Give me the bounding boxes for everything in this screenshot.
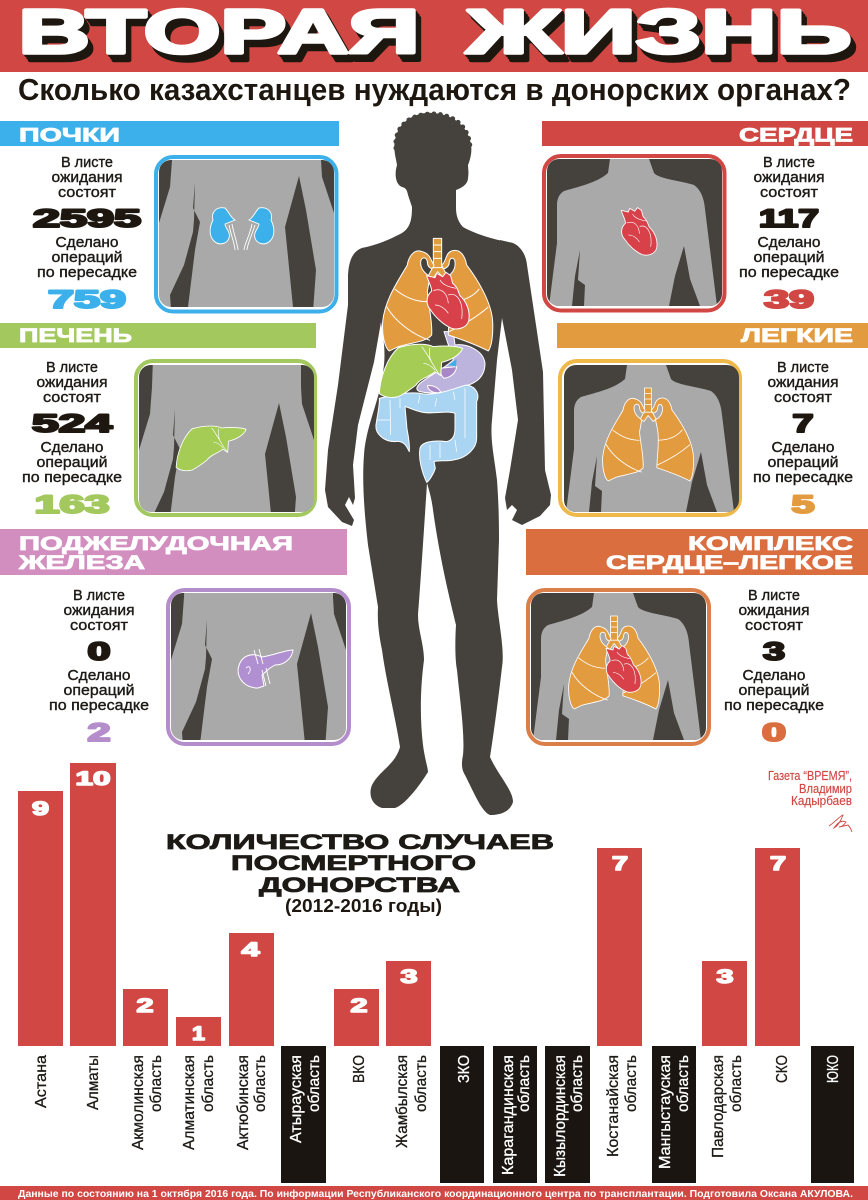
- kidneys stats: [33, 154, 141, 314]
- lungs illustration: [560, 361, 740, 515]
- liver stats: 163: [34, 491, 110, 519]
- region labels: ЗКО: [456, 1055, 473, 1083]
- complex heading: КОМПЛЕКС: [688, 534, 853, 555]
- internal organs: [376, 238, 493, 482]
- pancreas heading: [0, 529, 347, 575]
- panel: pancreas: [0, 529, 351, 746]
- lungs stats: операций: [768, 454, 838, 471]
- complex stats: [724, 587, 824, 747]
- credit: Газета “ВРЕМЯ”,: [768, 769, 852, 783]
- kidneys stats: ожидания: [52, 169, 122, 186]
- heart stats: операций: [754, 249, 824, 266]
- title: ВТОРАЯ: [24, 6, 425, 74]
- bar values: 3: [400, 967, 418, 988]
- chart title: КОЛИЧЕСТВО СЛУЧАЕВ: [166, 831, 554, 854]
- bar values: 9: [32, 799, 49, 820]
- bar values: 7: [612, 854, 628, 875]
- title: ЖИЗНЬ: [467, 0, 854, 70]
- region labels: [33, 1055, 842, 1177]
- region labels: область: [148, 1055, 165, 1112]
- complex stats: Сделано: [743, 667, 805, 684]
- panel: lungs: [557, 323, 868, 519]
- heart illustration: [544, 156, 724, 310]
- pancreas stats: операций: [64, 682, 134, 699]
- lungs stats: состоят: [774, 389, 832, 406]
- heart stats: состоят: [760, 184, 818, 201]
- pancreas heading: ЖЕЛЕЗА: [17, 553, 145, 574]
- lungs stats: по пересадке: [753, 469, 853, 486]
- region labels: Жамбылская: [394, 1055, 411, 1148]
- region labels: Мангыстауская: [657, 1055, 674, 1169]
- bar values: 7: [770, 854, 786, 875]
- region labels: Костанайская: [605, 1055, 622, 1157]
- heart stats: В листе: [763, 154, 815, 171]
- region labels: Астана: [33, 1055, 50, 1108]
- complex stats: 3: [763, 638, 785, 666]
- title: ЖИЗНЬ: [469, 3, 856, 72]
- region labels: Карагандинская: [500, 1055, 517, 1175]
- pancreas illustration: [166, 588, 351, 746]
- kidneys stats: операций: [52, 249, 122, 266]
- region labels: область: [252, 1055, 269, 1112]
- liver stats: В листе: [46, 359, 98, 376]
- liver stats: Сделано: [41, 439, 103, 456]
- liver stats: операций: [36, 454, 108, 471]
- signature: [829, 815, 852, 832]
- kidneys illustration: [154, 155, 338, 314]
- panel: heart: [542, 121, 868, 314]
- header banner: [0, 0, 868, 74]
- heart stats: ожидания: [754, 169, 824, 186]
- complex stats: ожидания: [738, 602, 810, 619]
- region labels: Алматинская: [181, 1055, 198, 1150]
- bar values: 3: [716, 967, 734, 988]
- kidneys heading: [0, 121, 339, 146]
- pancreas stats: состоят: [70, 617, 128, 634]
- bar chart: [18, 763, 854, 1183]
- heart heading: [542, 121, 868, 146]
- title: ВТОРАЯ: [18, 0, 420, 67]
- region labels: Алматы: [85, 1055, 102, 1110]
- kidneys stats: 759: [48, 286, 126, 314]
- red bars: [18, 763, 800, 1046]
- lungs stats: [753, 359, 853, 519]
- kidneys stats: состоят: [58, 184, 116, 201]
- organ: large intestine: [376, 385, 478, 482]
- heart stats: по пересадке: [739, 264, 839, 281]
- organ: liver: [379, 344, 463, 397]
- liver stats: состоят: [43, 389, 101, 406]
- region labels: область: [623, 1055, 640, 1112]
- bar values: 2: [350, 996, 368, 1017]
- chart title: (2012-2016 годы): [285, 896, 442, 916]
- liver heading: ПЕЧЕНЬ: [19, 326, 132, 347]
- pancreas stats: по пересадке: [49, 697, 149, 714]
- bar values: 4: [242, 940, 260, 961]
- bar values: 10: [76, 769, 110, 790]
- region labels: область: [413, 1055, 430, 1112]
- liver illustration: [134, 359, 317, 517]
- organ: stomach: [417, 332, 485, 393]
- heart stats: Сделано: [758, 234, 820, 251]
- liver stats: 524: [32, 410, 112, 438]
- heart heading: СЕРДЦЕ: [739, 126, 853, 146]
- region labels: Акмолинская: [130, 1055, 147, 1150]
- complex heading: СЕРДЦЕ–ЛЕГКОЕ: [606, 553, 853, 574]
- credit: Владимир: [799, 782, 852, 796]
- bar values: 2: [136, 996, 154, 1017]
- kidneys stats: Сделано: [56, 234, 118, 251]
- human body figure: [325, 113, 551, 815]
- chart title: ПОСМЕРТНОГО: [231, 852, 476, 875]
- liver stats: [22, 359, 122, 519]
- region labels: область: [569, 1055, 586, 1112]
- body silhouette: [325, 113, 551, 815]
- region labels: ЮКО: [825, 1055, 842, 1083]
- region labels: Павлодарская: [710, 1055, 727, 1158]
- region labels: СКО: [774, 1055, 791, 1083]
- black zero bars: [281, 1046, 854, 1183]
- organ: lungs: [382, 238, 493, 351]
- panel: heart-lung complex: [526, 529, 868, 747]
- kidneys heading: ПОЧКИ: [19, 126, 120, 146]
- complex stats: по пересадке: [724, 697, 824, 714]
- region labels: Кызылординская: [552, 1055, 569, 1177]
- kidneys stats: по пересадке: [37, 264, 137, 281]
- region labels: Актюбинская: [235, 1055, 252, 1150]
- pancreas heading: ПОДЖЕЛУДОЧНАЯ: [19, 534, 293, 555]
- pancreas stats: ожидания: [64, 602, 134, 619]
- bar values: 1: [192, 1024, 206, 1045]
- region labels: ВКО: [351, 1055, 368, 1083]
- pancreas stats: Сделано: [68, 667, 130, 684]
- chart title: ДОНОРСТВА: [259, 874, 460, 897]
- title: ЖИЗНЬ: [465, 0, 852, 67]
- panel: kidneys: [0, 121, 339, 314]
- complex stats: В листе: [748, 587, 800, 604]
- region labels: область: [675, 1055, 692, 1112]
- liver stats: ожидания: [36, 374, 108, 391]
- credit: Кадырбаев: [791, 794, 852, 808]
- subtitle: Сколько казахстанцев нуждаются в донорских органах?: [18, 72, 851, 107]
- lungs stats: 5: [792, 491, 815, 519]
- lungs stats: В листе: [777, 359, 829, 376]
- pancreas stats: 0: [88, 638, 110, 666]
- title: ВТОРАЯ: [22, 3, 424, 72]
- title: ВТОРАЯ: [20, 0, 422, 70]
- region labels: Атырауская: [288, 1055, 305, 1143]
- region labels: область: [200, 1055, 217, 1112]
- complex illustration: [528, 590, 709, 744]
- pancreas stats: [49, 587, 149, 747]
- kidneys stats: В листе: [61, 154, 113, 171]
- panel: liver: [0, 323, 317, 517]
- credit: [768, 769, 852, 832]
- complex stats: операций: [738, 682, 810, 699]
- heart stats: 117: [759, 205, 819, 233]
- heart stats: 39: [764, 286, 814, 314]
- lungs heading: [557, 323, 868, 348]
- footer: Данные по состоянию на 1 октября 2016 года. По информации Республиканского координационного центра по трансплантации. Подготовила Оксана АКУЛОВА.: [18, 1188, 853, 1200]
- liver heading: [0, 323, 316, 348]
- chart title: [166, 831, 554, 916]
- complex stats: 0: [762, 719, 786, 747]
- pancreas stats: В листе: [73, 587, 125, 604]
- pancreas stats: 2: [88, 719, 110, 747]
- kidneys stats: 2595: [33, 205, 141, 233]
- lungs stats: Сделано: [772, 439, 834, 456]
- lungs heading: ЛЕГКИЕ: [741, 326, 853, 347]
- title: [18, 0, 857, 74]
- liver stats: по пересадке: [22, 469, 122, 486]
- complex stats: состоят: [745, 617, 803, 634]
- bar values: [32, 769, 786, 1045]
- lungs stats: 7: [792, 410, 814, 438]
- lungs stats: ожидания: [768, 374, 838, 391]
- heart stats: [739, 154, 839, 314]
- region labels: область: [728, 1055, 745, 1112]
- title: ЖИЗНЬ: [470, 6, 857, 74]
- organ: heart: [427, 272, 469, 329]
- region labels: область: [516, 1055, 533, 1112]
- complex heading: [526, 529, 868, 575]
- region labels: область: [306, 1055, 323, 1112]
